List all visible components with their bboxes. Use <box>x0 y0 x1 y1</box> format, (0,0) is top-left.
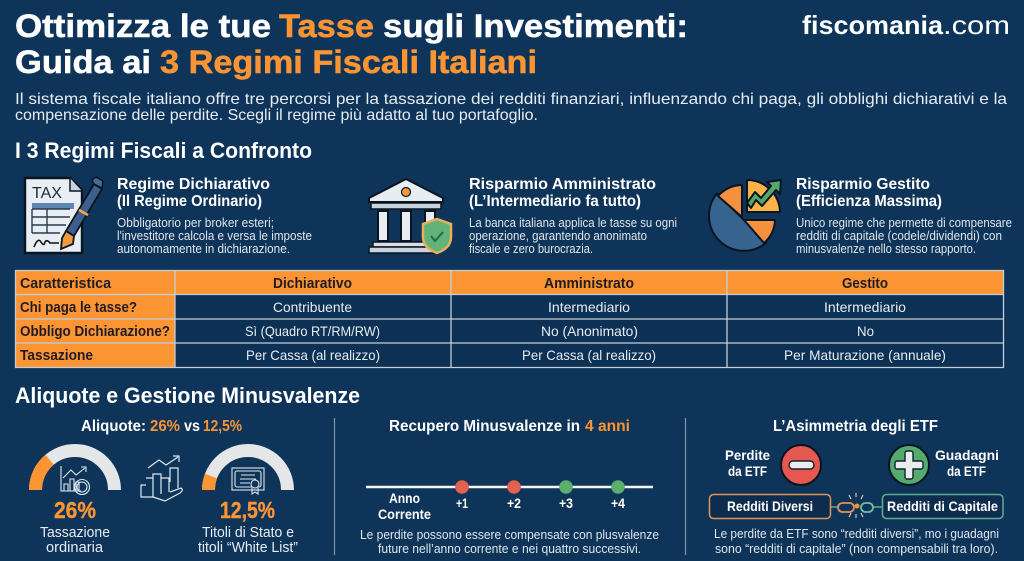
comparison table: Obbligo Dichiarazione? <box>20 324 170 340</box>
label: perdite da ETF <box>725 447 770 479</box>
icon: chart with coin <box>61 466 90 494</box>
title: sugli Investimenti: <box>383 8 688 44</box>
box: redditi di capitale <box>882 494 1003 518</box>
description: operazione, garantendo anonimato <box>469 229 647 243</box>
label: guadagni da ETF <box>935 447 999 479</box>
icon: pie chart with arrow <box>709 180 781 251</box>
label: perdite da ETF: Perdite <box>725 447 770 463</box>
icon: broken chain <box>831 493 882 518</box>
comparison table: Per Cassa (al realizzo) <box>522 347 656 363</box>
label: tassazione ordinaria: Tassazione <box>40 525 110 541</box>
description <box>469 216 677 256</box>
timeline: +1 <box>456 495 468 511</box>
panel: aliquote <box>35 418 298 556</box>
icon: hand with growth chart <box>141 456 182 501</box>
icon: tax document with pen: TAX <box>32 185 62 202</box>
intro text <box>15 91 1007 124</box>
title: 3 Regimi Fiscali Italiani <box>160 44 537 80</box>
comparison table: Sì (Quadro RT/RM/RW) <box>245 323 380 339</box>
heading: regime dichiarativo: (Il Regime Ordinario) <box>117 193 262 210</box>
description: l'investitore calcola e versa le imposte <box>117 229 312 243</box>
heading: risparmio gestito <box>796 176 942 210</box>
comparison table: No <box>857 323 874 339</box>
comparison table: Per Maturazione (annuale) <box>784 347 946 363</box>
box: redditi di capitale: Redditi di Capitale <box>887 498 998 514</box>
label: perdite da ETF: da ETF <box>728 463 767 479</box>
title: Ottimizza le tue <box>15 8 271 44</box>
icon: bank with shield <box>369 179 451 253</box>
heading: risparmio amministrato: Risparmio Amministrato <box>469 176 656 193</box>
panel: risparmio amministrato <box>369 176 677 256</box>
heading: regime dichiarativo: Regime Dichiarativo <box>117 176 270 193</box>
panel: recupero minusvalenze <box>360 418 659 556</box>
heading: aliquote 26 vs 12,5: Aliquote: <box>81 418 146 435</box>
timeline: +3 <box>559 495 573 511</box>
label: titoli di stato: titoli “White List” <box>198 540 298 556</box>
description: Le perdite da ETF sono “redditi diversi”, mo i guadagni <box>714 526 999 541</box>
intro text: compensazione delle perdite. Scegli il regime più adatto al tuo portafoglio. <box>15 107 538 124</box>
logo: fiscomania.com <box>802 10 1010 40</box>
description <box>714 526 999 556</box>
timeline: Corrente <box>378 506 431 522</box>
icon: plus circle <box>889 445 929 485</box>
label: guadagni da ETF: Guadagni <box>935 447 999 463</box>
description: minusvalenze nello stesso rapporto. <box>796 242 976 256</box>
description: La banca italiana applica le tasse su ogni <box>469 216 677 230</box>
label: guadagni da ETF: da ETF <box>947 463 986 479</box>
comparison table: Contribuente <box>273 299 352 315</box>
title: Guida ai <box>15 44 151 80</box>
heading: recupero: Recupero Minusvalenze in <box>389 418 580 435</box>
heading: regime dichiarativo <box>117 176 270 210</box>
heading: asimmetria: L’Asimmetria degli ETF <box>773 418 938 435</box>
timeline <box>366 480 653 522</box>
heading: recupero: 4 anni <box>585 418 630 435</box>
description: autonomamente in dichiarazione. <box>117 242 290 256</box>
gauge: 12,5% <box>208 450 288 494</box>
description <box>360 527 659 556</box>
box: redditi diversi: Redditi Diversi <box>727 498 813 514</box>
label: titoli di stato <box>198 525 298 556</box>
panel: regime dichiarativo <box>25 176 312 256</box>
comparison table: Dichiarativo <box>273 276 352 292</box>
heading: aliquote 26 vs 12,5: 12,5% <box>203 418 242 435</box>
description: sono “redditi di capitale” (non compensabili tra loro). <box>715 541 998 556</box>
timeline: +2 <box>507 495 521 511</box>
heading: aliquote 26 vs 12,5: vs <box>184 418 200 435</box>
description <box>796 216 1012 256</box>
label: tassazione ordinaria <box>40 525 110 556</box>
comparison table <box>15 270 1004 368</box>
comparison table: Amministrato <box>544 276 634 292</box>
heading: aliquote: Aliquote e Gestione Minusvalenze <box>15 383 360 408</box>
description: fiscale e zero burocrazia. <box>469 242 593 256</box>
comparison table: Gestito <box>842 276 888 292</box>
comparison table: Intermediario <box>824 299 906 315</box>
description: Obbligatorio per broker esteri; <box>117 216 274 230</box>
comparison table: Intermediario <box>548 299 630 315</box>
box: redditi diversi <box>710 494 830 518</box>
comparison table: Tassazione <box>20 348 93 364</box>
heading: risparmio amministrato <box>469 176 656 210</box>
description: future nell’anno corrente e nei quattro successivi. <box>378 541 641 556</box>
description: Le perdite possono essere compensate con plusvalenze <box>360 527 659 542</box>
icon: tax document with pen <box>25 177 103 253</box>
value: 12,5%: 12,5% <box>220 497 275 523</box>
logo: fiscomania.com: fiscomania <box>802 10 944 40</box>
title <box>15 8 688 80</box>
timeline: +4 <box>611 495 625 511</box>
comparison table: No (Anonimato) <box>541 323 638 339</box>
comparison table: Caratteristica <box>20 276 112 292</box>
icon: certificate <box>232 468 264 494</box>
comparison table: Per Cassa (al realizzo) <box>246 347 380 363</box>
logo: fiscomania.com: .com <box>943 10 1010 40</box>
comparison table: Chi paga le tasse? <box>20 300 137 316</box>
intro text: Il sistema fiscale italiano offre tre percorsi per la tassazione dei redditi finanziari, influenzando chi paga, gli obblighi dichiarativi e la <box>15 91 1007 108</box>
gauge: 26% <box>35 450 114 494</box>
heading: aliquote 26 vs 12,5 <box>81 418 242 435</box>
description <box>117 216 312 256</box>
panel: asimmetria ETF <box>710 418 1003 556</box>
title: Tasse <box>279 8 374 44</box>
panel: risparmio gestito <box>709 176 1012 256</box>
heading: risparmio gestito: (Efficienza Massima) <box>796 193 942 210</box>
timeline: Anno <box>389 490 420 506</box>
heading: regimi: I 3 Regimi Fiscali a Confronto <box>15 138 312 163</box>
label: tassazione ordinaria: ordinaria <box>46 540 104 556</box>
heading: risparmio amministrato: (L’Intermediario fa tutto) <box>469 193 641 210</box>
value: 26%: 26% <box>54 497 96 523</box>
description: redditi di capitale (codele/dividendi) con <box>796 229 1002 243</box>
icon: minus circle <box>781 445 821 485</box>
label: titoli di stato: Titoli di Stato e <box>202 525 294 541</box>
heading: risparmio gestito: Risparmio Gestito <box>796 176 930 193</box>
heading: aliquote 26 vs 12,5: 26% <box>150 418 180 435</box>
